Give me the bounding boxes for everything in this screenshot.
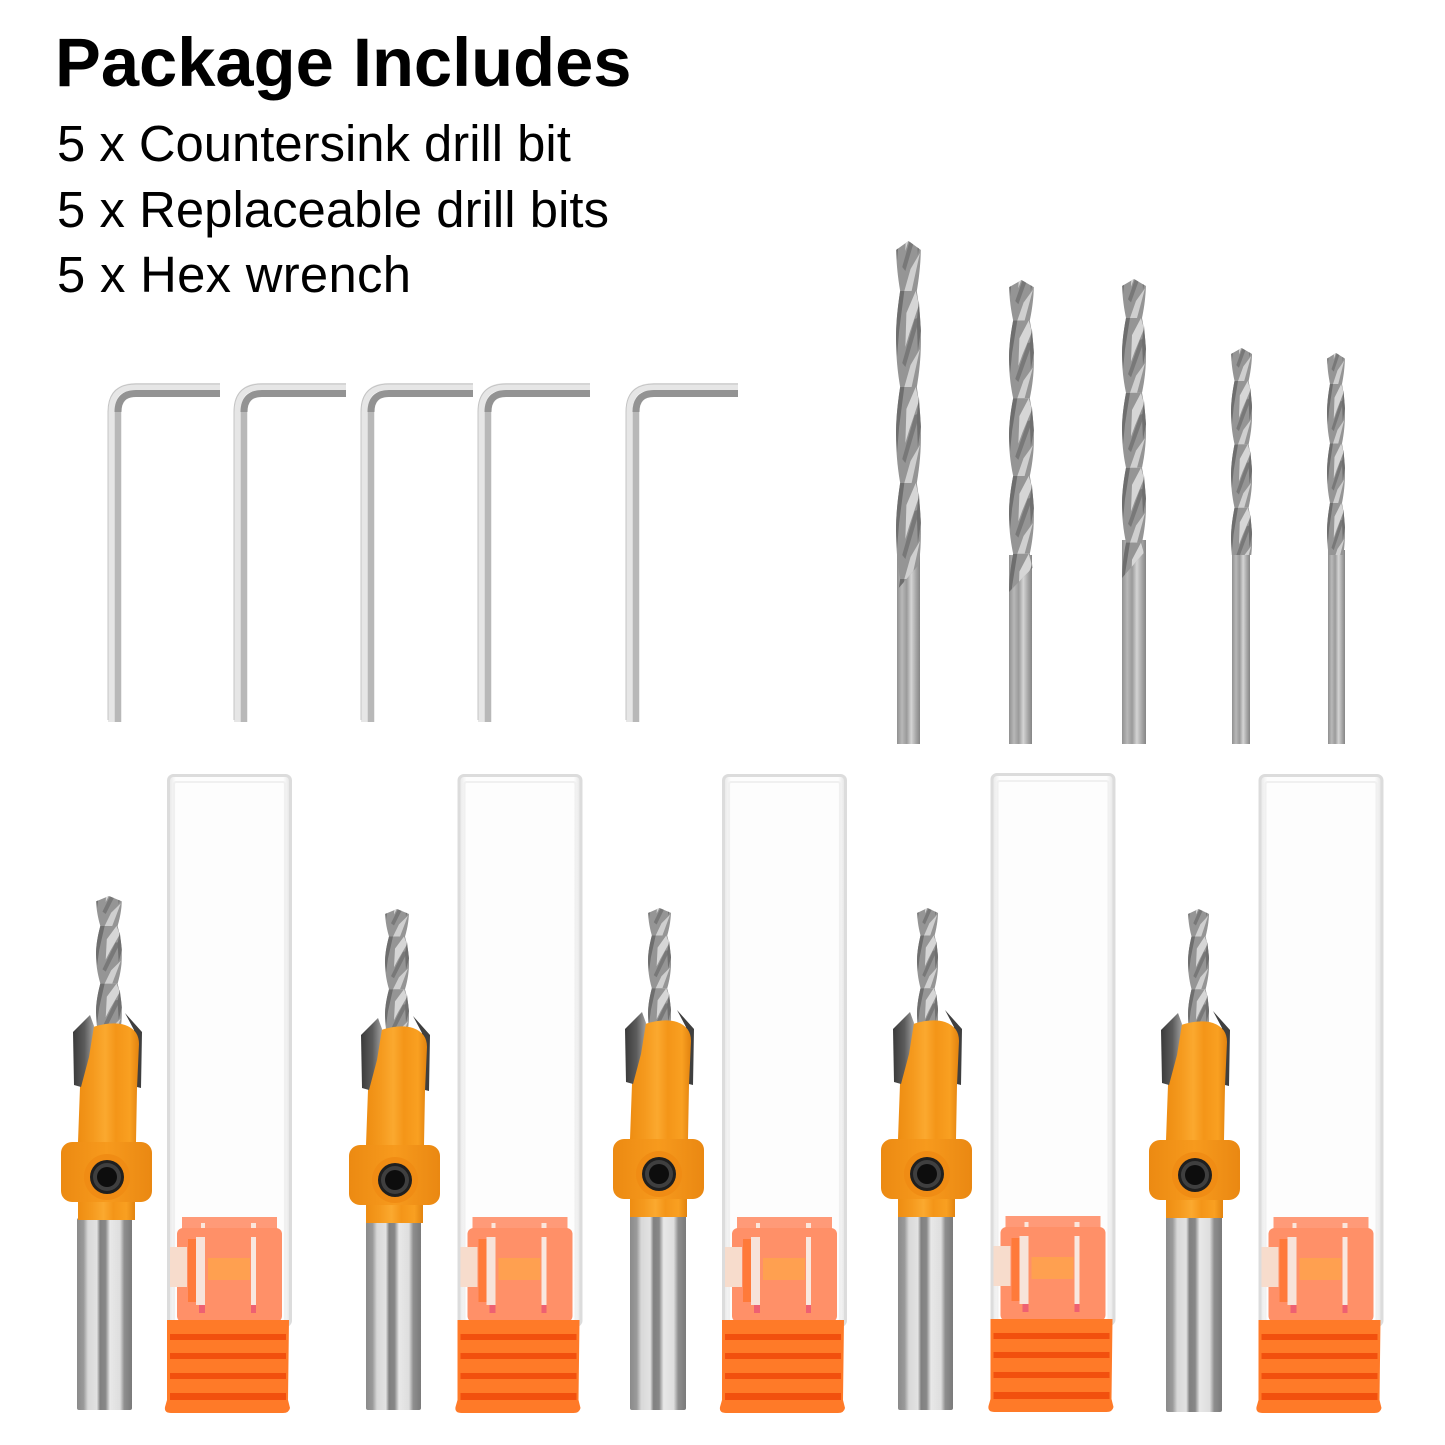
hex wrench 1 [108,384,220,722]
drill bit 4 [1231,318,1252,744]
storage tube 1 [165,776,290,1413]
countersink set 1 [61,776,290,1413]
countersink set 2 [349,776,581,1413]
list item: hex wrench: 5 x Hex wrench [57,246,411,303]
drill bit 3 [1122,243,1146,744]
countersink set 3 [613,776,846,1413]
hex wrench 4 [478,384,590,722]
countersink bit 3 [613,883,704,1410]
countersink bit 5 [1149,884,1240,1412]
drill bit 1 [896,241,921,744]
countersink set 5 [1149,776,1382,1413]
storage tube 2 [455,776,581,1413]
drill bit 5 [1327,324,1345,744]
hex wrench 3 [361,384,473,722]
list item: replaceable drill bits: 5 x Replaceable drill bits [57,181,609,238]
list item: countersink drill bit: 5 x Countersink drill bit [57,115,571,172]
title: Package Includes [55,24,632,101]
countersink bit 1 [61,868,152,1410]
countersink bit 2 [349,884,440,1410]
storage tube 5 [1256,776,1382,1413]
storage tube 4 [988,774,1114,1412]
countersink bit 4 [881,883,972,1410]
drill bit 2 [1009,243,1034,744]
hex wrench 5 [626,384,738,722]
hex wrench 2 [234,384,346,722]
countersink set 4 [881,774,1114,1412]
replaceable drill bits [896,241,1345,744]
hex wrenches [108,384,738,722]
contents list [57,115,609,303]
storage tube 3 [720,776,846,1413]
